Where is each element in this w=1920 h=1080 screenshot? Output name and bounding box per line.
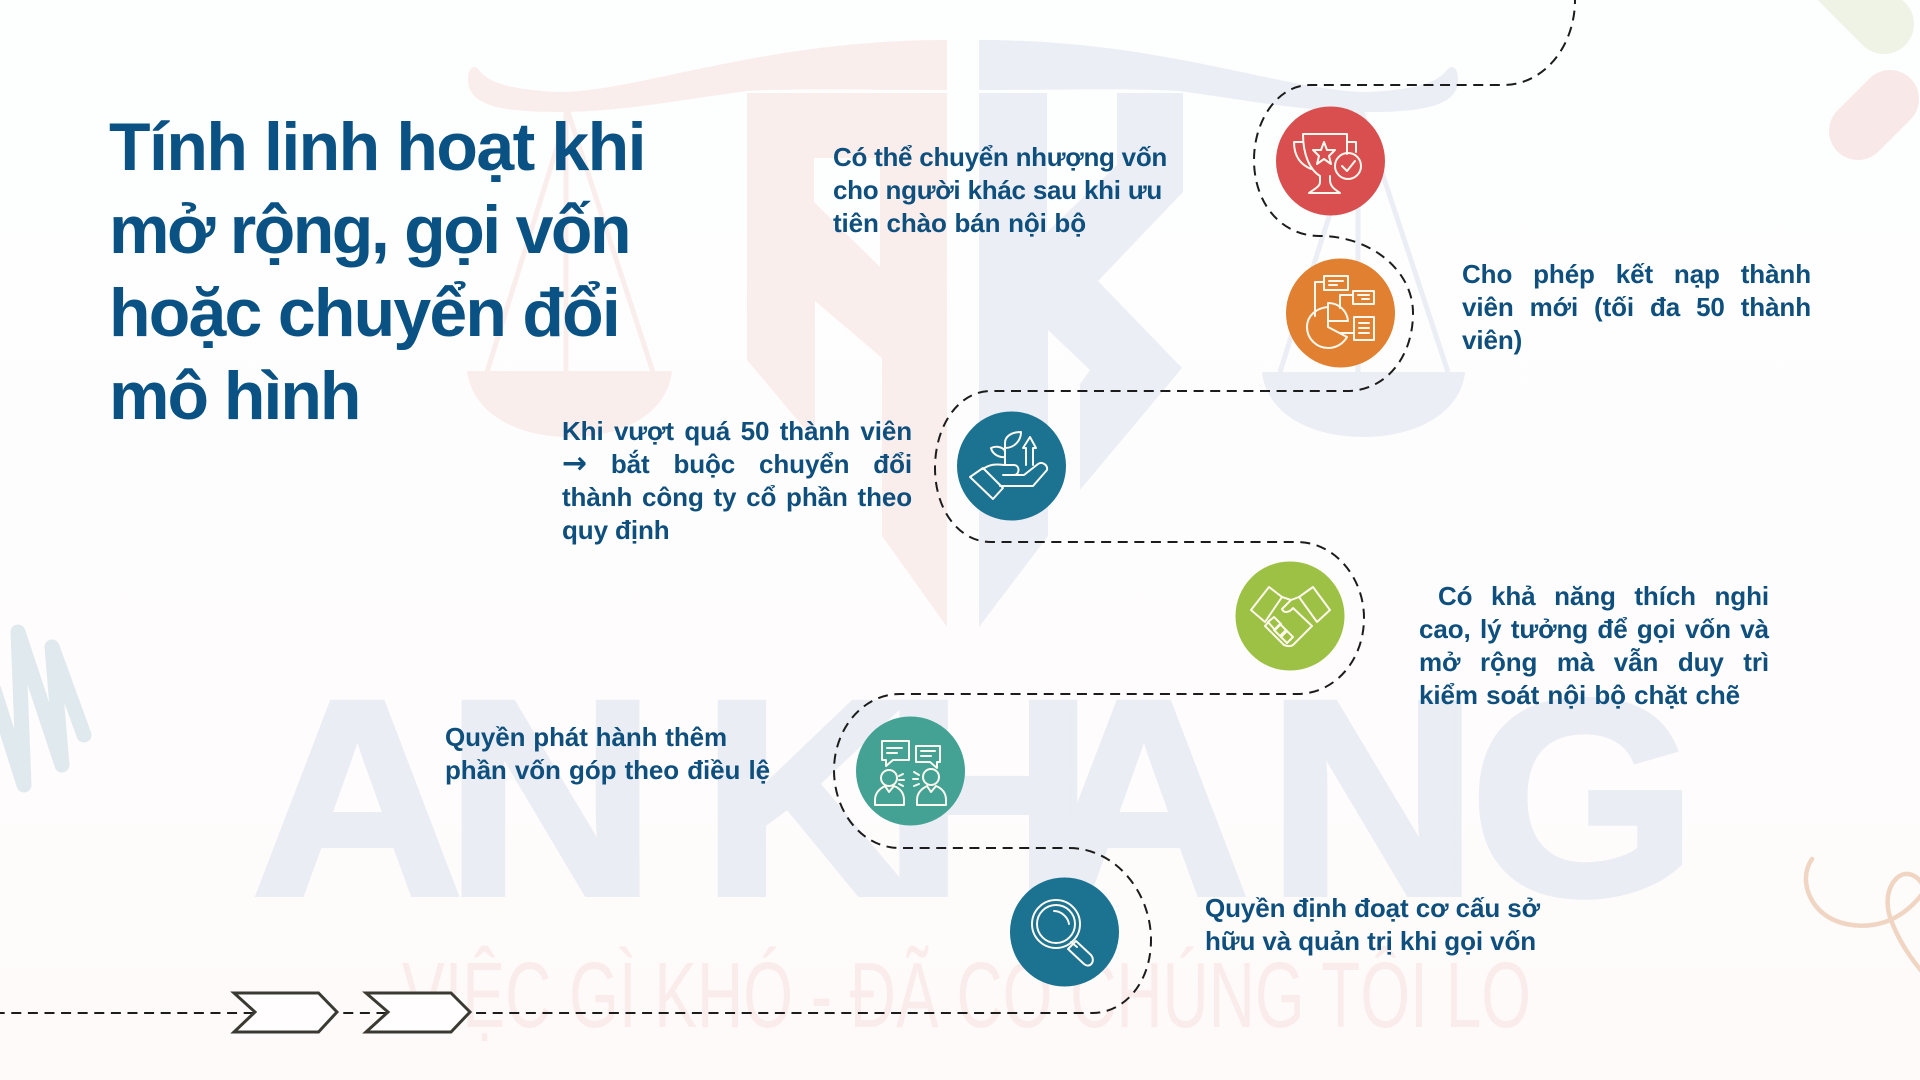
text: admit new members: viên mới (tối đa 50 thành bbox=[1462, 292, 1811, 322]
icon: two people talking on teal circle bbox=[856, 716, 965, 826]
text: transfer capital: cho người khác sau khi ưu bbox=[833, 174, 1162, 204]
title: hoặc chuyển đổi bbox=[109, 275, 619, 351]
text: ownership structure: hữu và quản trị khi gọi vốn bbox=[1205, 926, 1536, 956]
icon: hand with plant on blue circle bbox=[957, 412, 1066, 520]
title: mô hình bbox=[109, 358, 359, 434]
decoration: green pill bbox=[1830, 0, 1884, 24]
title bbox=[109, 109, 645, 434]
dashed path bbox=[0, 0, 1575, 1013]
title: Tính linh hoạt khi bbox=[109, 109, 645, 185]
text: adaptability: Có khả năng thích nghi bbox=[1438, 580, 1769, 610]
icon: trophy on red circle bbox=[1276, 106, 1385, 216]
text: ownership structure bbox=[1205, 892, 1540, 956]
watermark: blue scale pan bbox=[1262, 112, 1465, 437]
icon: magnifying glass on blue circle bbox=[1010, 878, 1119, 986]
text: over 50 members: thành công ty cổ phần theo bbox=[562, 482, 912, 512]
text: over 50 members bbox=[562, 416, 912, 545]
title: mở rộng, gọi vốn bbox=[109, 192, 629, 268]
watermark: blue letter K bbox=[979, 93, 1183, 627]
watermark: pink scale pan bbox=[467, 112, 672, 437]
text: admit new members: Cho phép kết nạp thành bbox=[1462, 258, 1811, 288]
text: over 50 members: quy định bbox=[562, 515, 670, 545]
chevron 2 bbox=[366, 993, 470, 1032]
text: transfer capital: tiên chào bán nội bộ bbox=[833, 208, 1086, 238]
text: transfer capital bbox=[833, 142, 1167, 238]
text: transfer capital: Có thể chuyển nhượng vốn bbox=[833, 142, 1167, 172]
watermark: pink scale beam bbox=[468, 40, 947, 112]
decoration: right curl bbox=[1806, 859, 1920, 975]
text: adaptability: mở rộng mà vẫn duy trì bbox=[1419, 646, 1769, 676]
text: ownership structure: Quyền định đoạt cơ cấu sở bbox=[1205, 892, 1540, 922]
text: issue more capital: Quyền phát hành thêm bbox=[445, 722, 727, 752]
watermark: company name: AN KHANG bbox=[252, 643, 1697, 953]
icon: chart and documents on orange circle bbox=[1286, 258, 1395, 368]
text: over 50 members: Khi vượt quá 50 thành viên bbox=[562, 416, 912, 446]
text: over 50 members: → bắt buộc chuyển đổi bbox=[562, 446, 912, 481]
watermark: blue scale beam bbox=[979, 40, 1458, 112]
decoration: left scribble bbox=[0, 632, 84, 785]
chevron 1 bbox=[234, 993, 337, 1032]
text: admit new members: viên) bbox=[1462, 324, 1522, 354]
text: adaptability: kiểm soát nội bộ chặt chẽ bbox=[1419, 680, 1740, 710]
text: admit new members bbox=[1462, 258, 1811, 354]
text: adaptability: cao, lý tưởng để gọi vốn và bbox=[1419, 614, 1769, 644]
icon: handshake on green circle bbox=[1236, 562, 1344, 670]
text: issue more capital bbox=[445, 722, 770, 784]
text: issue more capital: phần vốn góp theo điều lệ bbox=[445, 754, 770, 784]
decoration: red pill bbox=[1858, 99, 1890, 131]
text: adaptability bbox=[1419, 580, 1770, 710]
watermark: pink letter N bbox=[747, 93, 947, 627]
